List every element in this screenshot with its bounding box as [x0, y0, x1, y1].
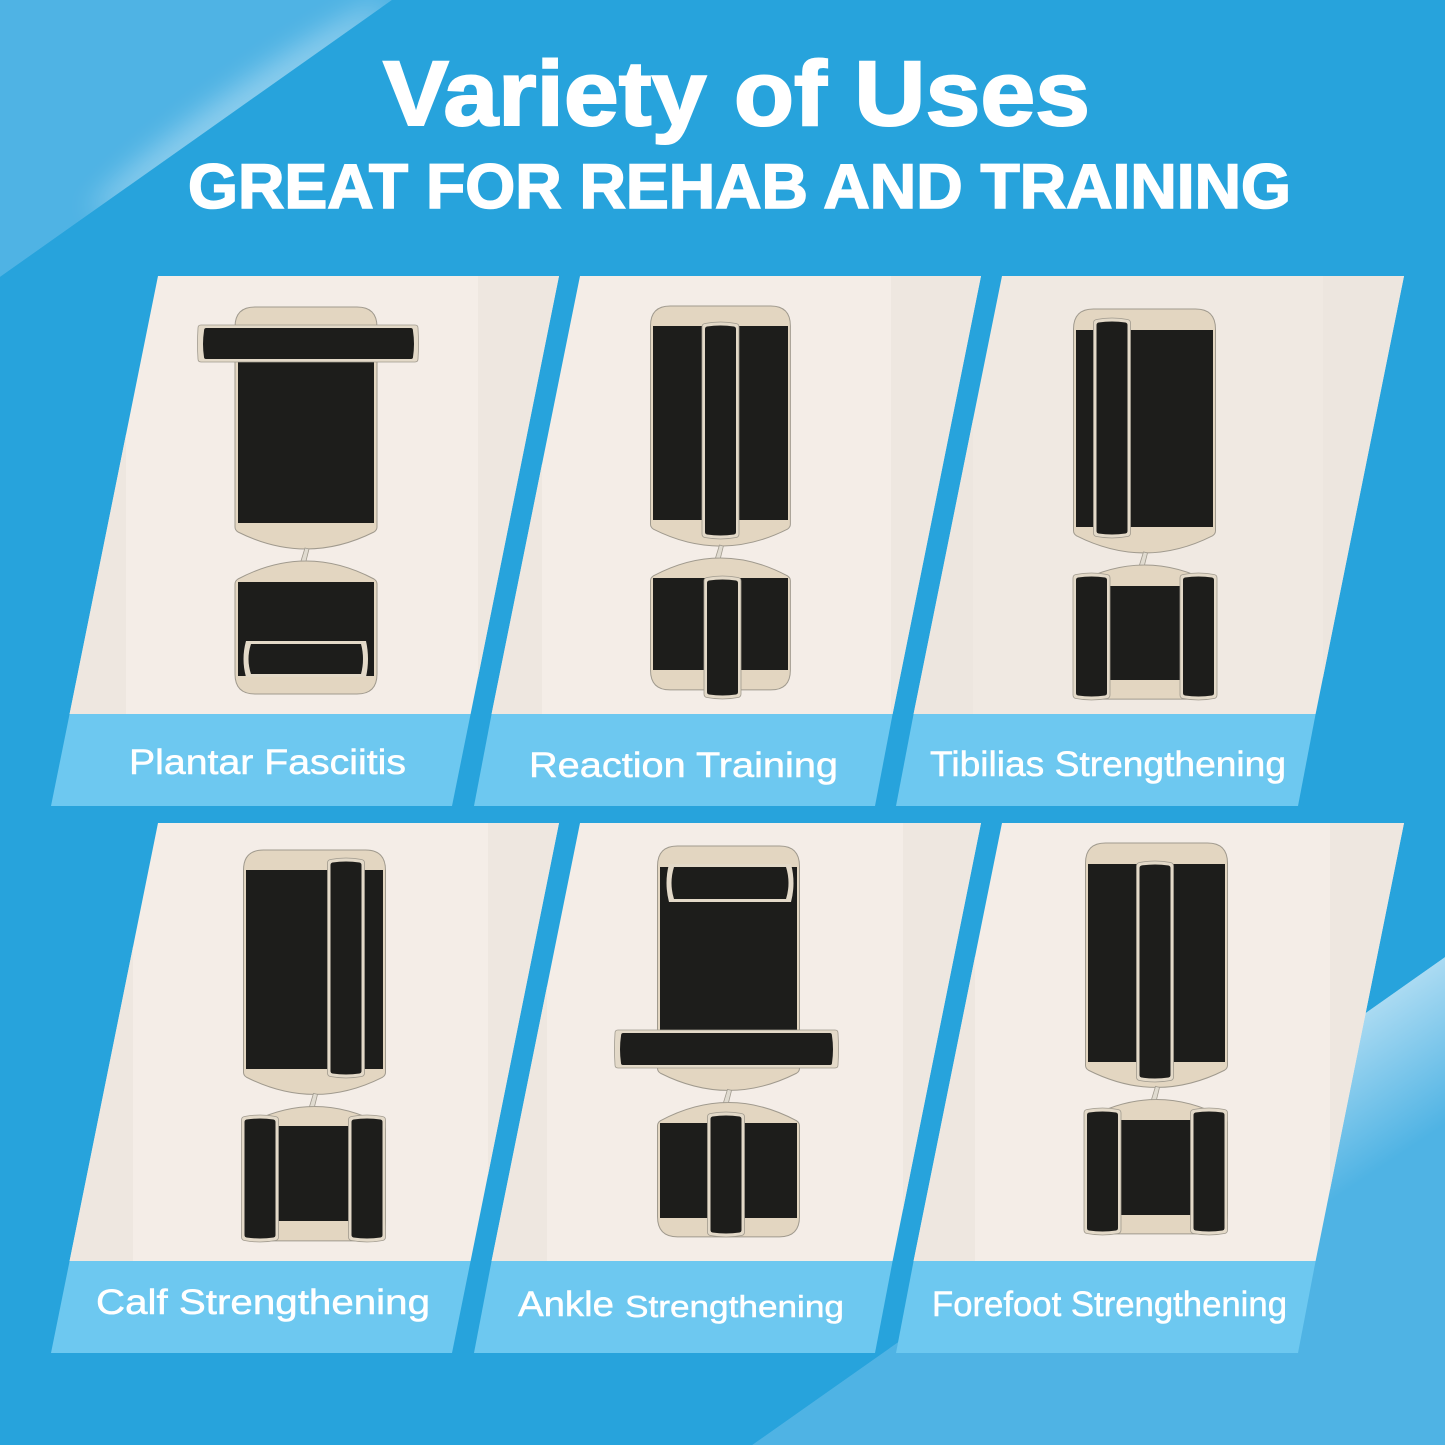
device illustration — [614, 846, 838, 1237]
label text — [518, 1285, 844, 1324]
device illustration — [242, 850, 386, 1242]
panel: Reaction Training — [474, 276, 991, 806]
label text: Strengthening — [625, 1289, 844, 1324]
label text: Reaction Training — [529, 746, 838, 785]
label text: Plantar Fasciitis — [129, 743, 406, 782]
label band — [51, 1261, 471, 1353]
label band — [896, 714, 1316, 806]
label text: Tibilias Strengthening — [930, 745, 1286, 784]
device illustration — [650, 306, 790, 699]
device illustration — [1073, 309, 1217, 700]
panel: Tibilias Strengthening — [896, 276, 1413, 806]
label band — [474, 714, 893, 806]
subtitle: GREAT FOR REHAB AND TRAINING — [188, 152, 1291, 222]
panel: Forefoot Strengthening — [896, 823, 1415, 1353]
device illustration — [1084, 843, 1228, 1235]
title: Variety of Uses — [383, 43, 1090, 145]
bottom-right corner accent — [752, 957, 1445, 1445]
device illustration — [198, 307, 418, 694]
label text: Forefoot Strengthening — [932, 1285, 1287, 1324]
label band — [896, 1261, 1316, 1353]
panel: Ankle Strengthening — [474, 823, 993, 1353]
panel: Plantar Fasciitis — [51, 276, 568, 806]
label text: Calf Strengthening — [96, 1283, 430, 1322]
top-left corner accent — [0, 0, 398, 277]
label band — [474, 1261, 893, 1353]
panel: Calf Strengthening — [51, 823, 568, 1353]
label band — [51, 714, 471, 806]
label text: Ankle — [518, 1285, 614, 1324]
